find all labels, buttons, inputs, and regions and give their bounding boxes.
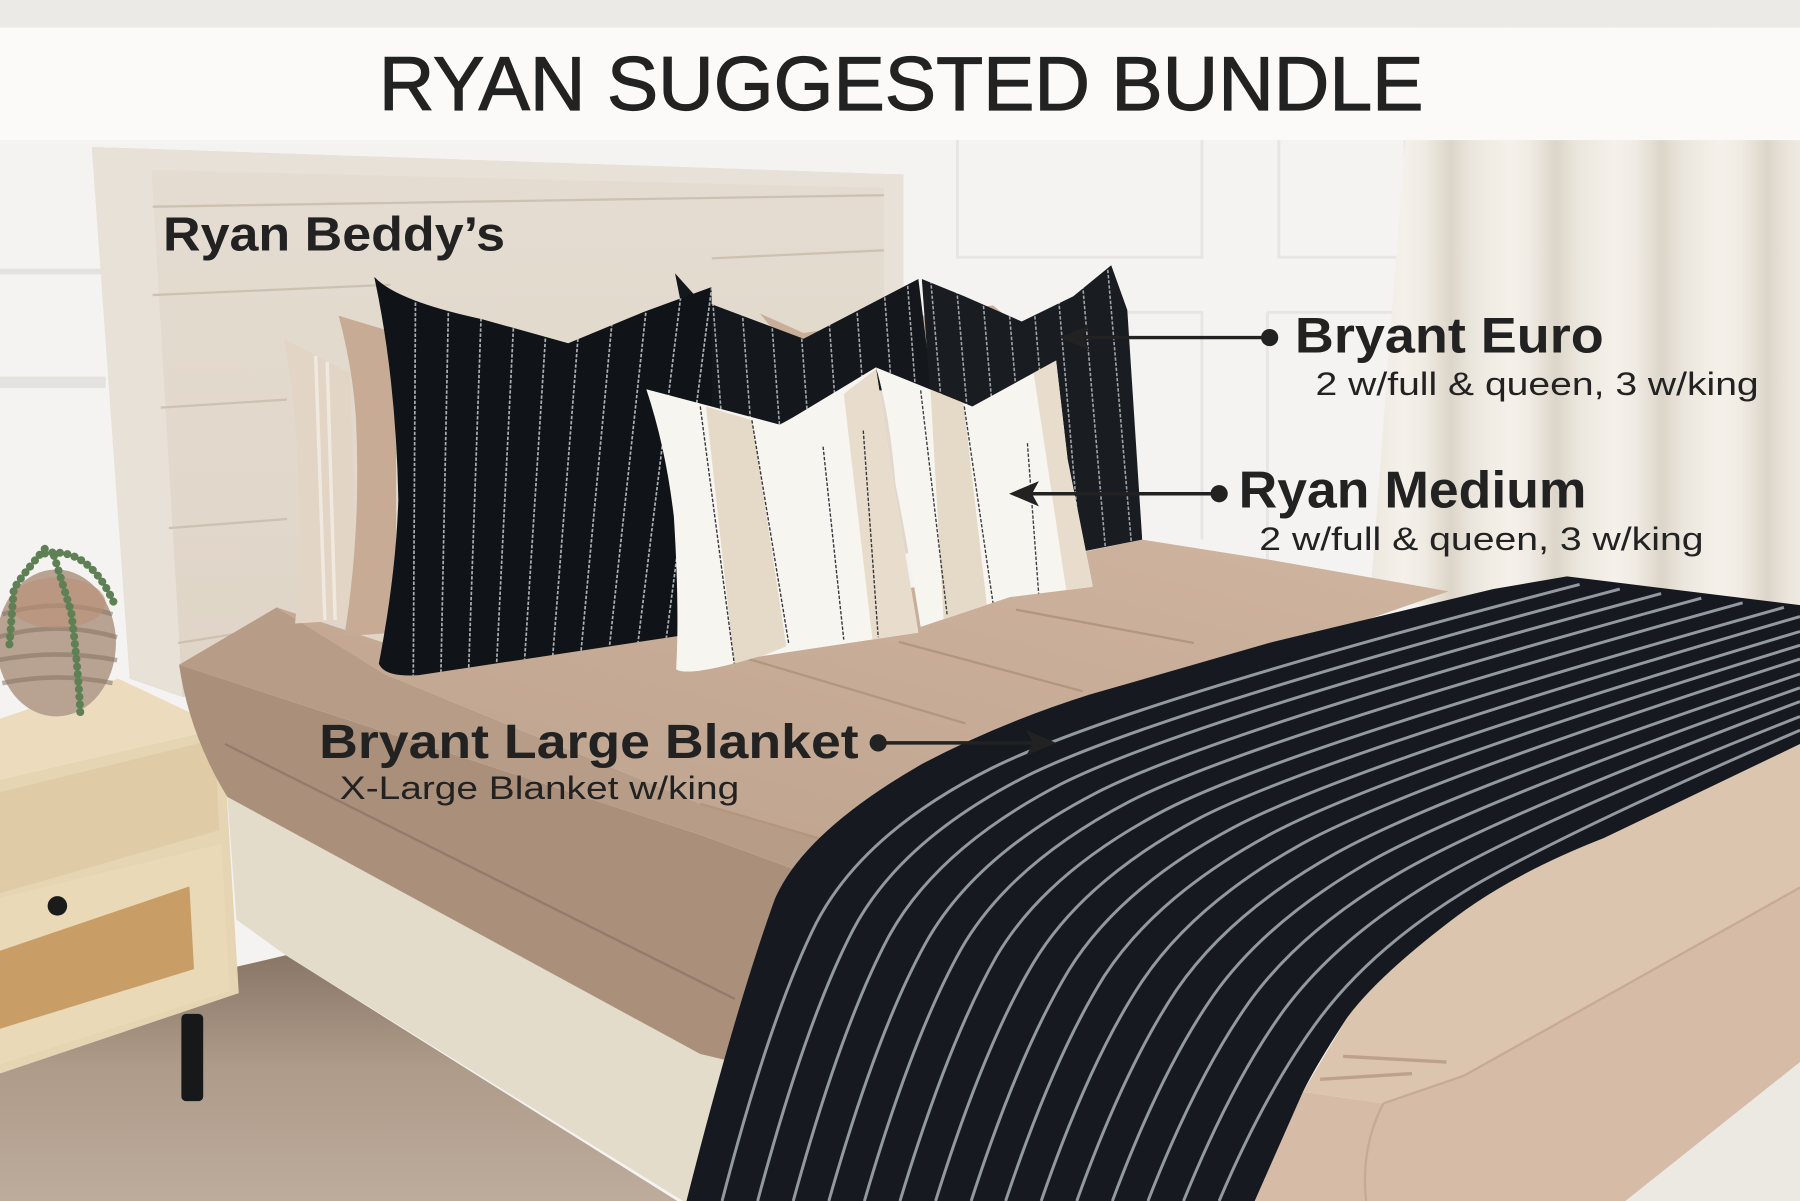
comforter xyxy=(179,540,1449,1062)
callout: Bryant Large Blanket xyxy=(319,715,859,806)
pillow: white right xyxy=(872,356,1099,637)
nightstand xyxy=(0,679,239,1101)
taupe pillow behind euros xyxy=(760,305,1007,367)
floor xyxy=(0,955,677,1201)
callout: Ryan Medium: Ryan Medium xyxy=(1239,460,1586,518)
blanket stripes xyxy=(722,584,1800,1201)
headboard xyxy=(92,147,918,697)
callout: Bryant Large Blanket: X-Large Blanket w/king xyxy=(340,770,739,806)
drawer knob xyxy=(48,896,67,916)
callout: Ryan Medium: 2 w/full & queen, 3 w/king xyxy=(1259,521,1704,557)
pillow: white left xyxy=(643,362,924,677)
callout: Bryant Euro: 2 w/full & queen, 3 w/king xyxy=(1316,366,1759,402)
bed frame xyxy=(227,797,735,1201)
taupe sham pillow xyxy=(339,316,396,636)
title band xyxy=(0,0,1800,140)
curtains xyxy=(1371,0,1800,643)
label: Ryan Beddy's: Ryan Beddy’s xyxy=(163,207,505,261)
arrow: Bryant Euro xyxy=(1060,325,1278,350)
title: RYAN SUGGESTED BUNDLE xyxy=(379,42,1423,127)
drawer front xyxy=(0,844,230,1064)
callout: Bryant Euro: Bryant Euro xyxy=(1295,306,1604,363)
potted plant xyxy=(0,549,117,716)
drawer rattan panel xyxy=(0,886,194,1029)
right bed side xyxy=(1255,744,1800,1201)
striped sham pillow xyxy=(284,339,356,623)
callout: Bryant Large Blanket: Bryant Large Blanket xyxy=(319,715,859,769)
blanket xyxy=(686,576,1800,1201)
pillow: euro right xyxy=(918,264,1148,563)
callout: Ryan Medium xyxy=(1239,460,1704,557)
nightstand leg xyxy=(181,1014,203,1101)
pillow: euro left xyxy=(367,264,723,683)
arrow: Ryan Medium xyxy=(1009,481,1228,506)
pillow: euro middle xyxy=(675,273,930,424)
arrow: Bryant Large Blanket xyxy=(870,730,1056,756)
callout: Bryant Euro xyxy=(1295,306,1759,402)
